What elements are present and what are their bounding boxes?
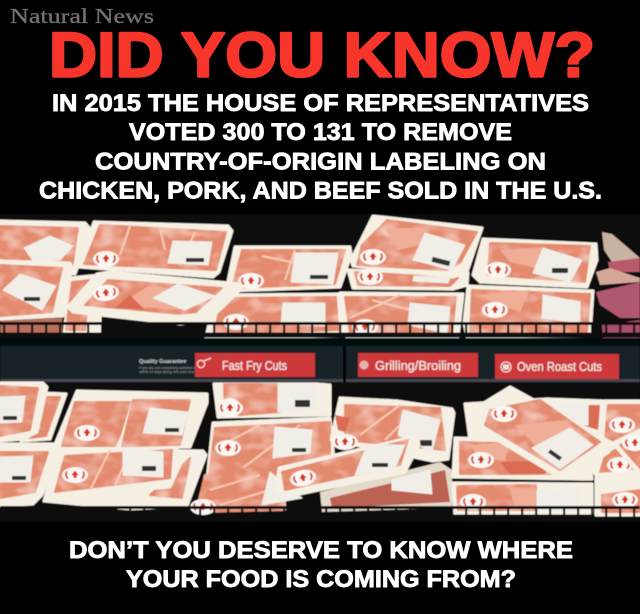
tray: lower right corner back (604, 401, 640, 454)
tray: top shelf second (79, 222, 232, 277)
brand: Natural News: Natural News (10, 4, 154, 28)
tray: lower shelf second (54, 391, 207, 447)
text block: closing question (69, 537, 573, 593)
tray: top shelf front left (0, 261, 72, 319)
bottom wire rail (0, 508, 640, 520)
tray: lower shelf left top (0, 383, 47, 441)
text block: closing question: YOUR FOOD IS COMING FROM? (126, 566, 516, 593)
text: quality guarantee: If you are not completely satisfied with (139, 366, 200, 370)
tray: lower right small (593, 441, 640, 477)
sign: Grilling/Broiling (358, 353, 478, 377)
text: quality guarantee (139, 359, 200, 374)
sign: Grilling/Broiling: Grilling/Broiling (375, 358, 461, 373)
text: quality guarantee: Quality Guarantee (139, 359, 186, 365)
tray: top shelf middle upper (226, 247, 351, 291)
tray: lower middle right (453, 438, 592, 479)
text: quality guarantee: within 14 days along with your receipt (139, 370, 199, 374)
text block: fact: CHICKEN, PORK, AND BEEF SOLD IN THE U.S. (39, 178, 602, 204)
sign: Fast Fry Cuts: Fast Fry Cuts (222, 358, 287, 373)
tray: top shelf lower right (464, 286, 593, 337)
tray: lower right bottom centre (453, 483, 592, 513)
tray: below front left (0, 318, 62, 337)
tray: lower centre top (214, 383, 330, 418)
tray: tilted lower right (468, 387, 612, 478)
tray: top shelf stacked (351, 216, 482, 277)
tray: top shelf lower centre (340, 293, 463, 338)
tray: right edge (613, 430, 640, 475)
tray: top shelf under stack (348, 269, 468, 289)
tray: lower right corner front (596, 478, 640, 515)
tray: lower left bottom (44, 449, 206, 509)
text block: fact (39, 90, 602, 204)
tray: top shelf middle lower (206, 294, 344, 338)
photo: meat display case (0, 214, 640, 522)
sign: Fast Fry Cuts (195, 353, 315, 377)
sign: Oven Roast Cuts (495, 354, 619, 379)
tray: top shelf right (473, 239, 597, 287)
title: DID YOU KNOW? (49, 20, 595, 90)
tray: lower centre (206, 418, 335, 490)
tray: lower shelf far left behind (21, 393, 66, 441)
sign strip (0, 346, 640, 379)
text block: closing question: DON’T YOU DESERVE TO KNOW WHERE (69, 537, 573, 564)
tray: lower right behind (465, 399, 604, 449)
tray: tilted lower centre (276, 436, 419, 496)
text block: fact: IN 2015 THE HOUSE OF REPRESENTATIVES (52, 90, 589, 117)
shelf edge (0, 338, 640, 346)
tray: lower left front (0, 444, 57, 506)
text block: fact: COUNTRY-OF-ORIGIN LABELING ON (95, 148, 546, 176)
tray: lower left top (46, 448, 181, 497)
text block: fact: VOTED 300 TO 131 TO REMOVE (129, 119, 512, 146)
tray: tilted tray (68, 272, 242, 324)
packaged red meat (596, 232, 640, 338)
top wire rail (0, 324, 640, 335)
sign: Oven Roast Cuts: Oven Roast Cuts (517, 359, 602, 374)
tray: top shelf back left (0, 221, 91, 274)
tray: wrapped darker meat (320, 462, 452, 512)
meat: lower centre bottom (190, 462, 302, 515)
tray: lower centre right (331, 398, 454, 461)
tray: under tilted tray (64, 275, 100, 335)
